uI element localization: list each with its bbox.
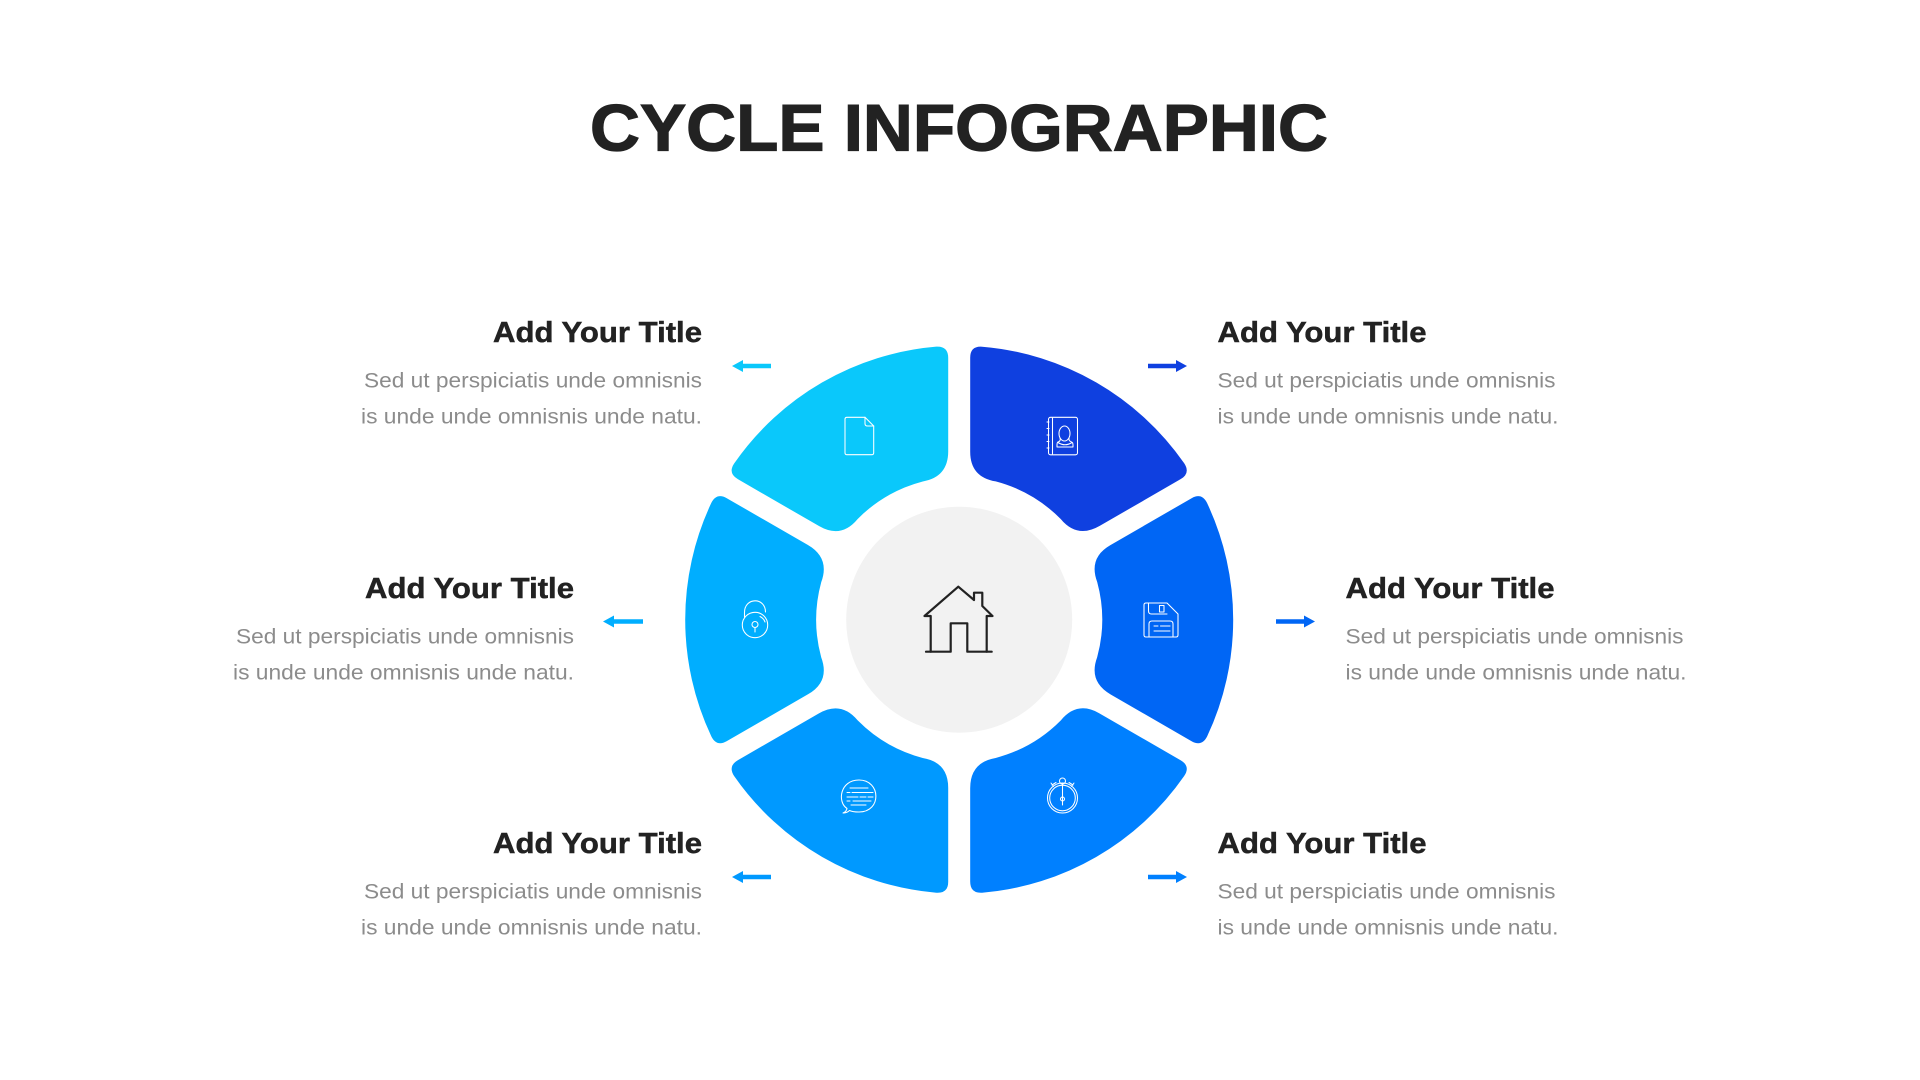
segment: bottom left: [732, 708, 948, 893]
arrow: middle right: [1276, 616, 1315, 628]
segment: left: [609, 467, 877, 747]
arrow: bottom left: [732, 871, 771, 883]
text block: bottom right: Sed ut perspiciatis unde omnisnis: [1218, 880, 1556, 904]
text block: bottom left: Sed ut perspiciatis unde omnisnis: [364, 880, 702, 904]
arrow: top left: [732, 360, 771, 372]
text block: bottom right: [1218, 828, 1558, 940]
arrow: middle left: [603, 616, 643, 628]
text block: middle left: is unde unde omnisnis unde natu.: [233, 660, 574, 684]
text block: middle right: Add Your Title: [1346, 573, 1554, 605]
icon: stopwatch: [1048, 778, 1078, 813]
text block: top left: is unde unde omnisnis unde natu.: [361, 404, 702, 428]
title: CYCLE INFOGRAPHIC: [590, 92, 1328, 164]
text block: top right: Sed ut perspiciatis unde omnisnis: [1218, 368, 1556, 392]
icon: padlock: [742, 601, 768, 638]
icon: contact book: [1047, 417, 1078, 455]
text block: bottom right: is unde unde omnisnis unde natu.: [1218, 916, 1558, 940]
text block: middle left: [233, 573, 574, 684]
text block: top left: [361, 317, 702, 428]
cycle diagram: [609, 286, 1309, 953]
text block: top left: Add Your Title: [493, 317, 702, 349]
text block: middle left: Sed ut perspiciatis unde omnisnis: [236, 624, 574, 648]
arrow: top right: [1148, 360, 1187, 372]
text block: middle left: Add Your Title: [365, 573, 574, 605]
text block: middle right: [1346, 573, 1686, 684]
arrow: bottom right: [1148, 871, 1187, 883]
segment: top right: [970, 347, 1187, 531]
icon: document: [845, 417, 874, 455]
text block: middle right: Sed ut perspiciatis unde omnisnis: [1346, 624, 1684, 648]
text block: bottom left: [361, 828, 702, 940]
segment: right: [1041, 493, 1309, 772]
icon: house: [924, 587, 992, 652]
text block: top right: [1218, 317, 1558, 428]
text block: top left: Sed ut perspiciatis unde omnisnis: [364, 368, 702, 392]
segment: bottom right: [922, 674, 1190, 953]
segment: top left: [728, 286, 996, 566]
text block: top right: Add Your Title: [1218, 317, 1426, 349]
text block: top right: is unde unde omnisnis unde natu.: [1218, 404, 1558, 428]
text block: middle right: is unde unde omnisnis unde natu.: [1346, 660, 1686, 684]
text block: bottom right: Add Your Title: [1218, 828, 1426, 860]
icon: speech bubble: [841, 780, 876, 813]
text block: bottom left: is unde unde omnisnis unde natu.: [361, 916, 702, 940]
text block: bottom left: Add Your Title: [493, 828, 702, 860]
icon: floppy disk: [1144, 603, 1178, 637]
center circle: [846, 507, 1072, 733]
